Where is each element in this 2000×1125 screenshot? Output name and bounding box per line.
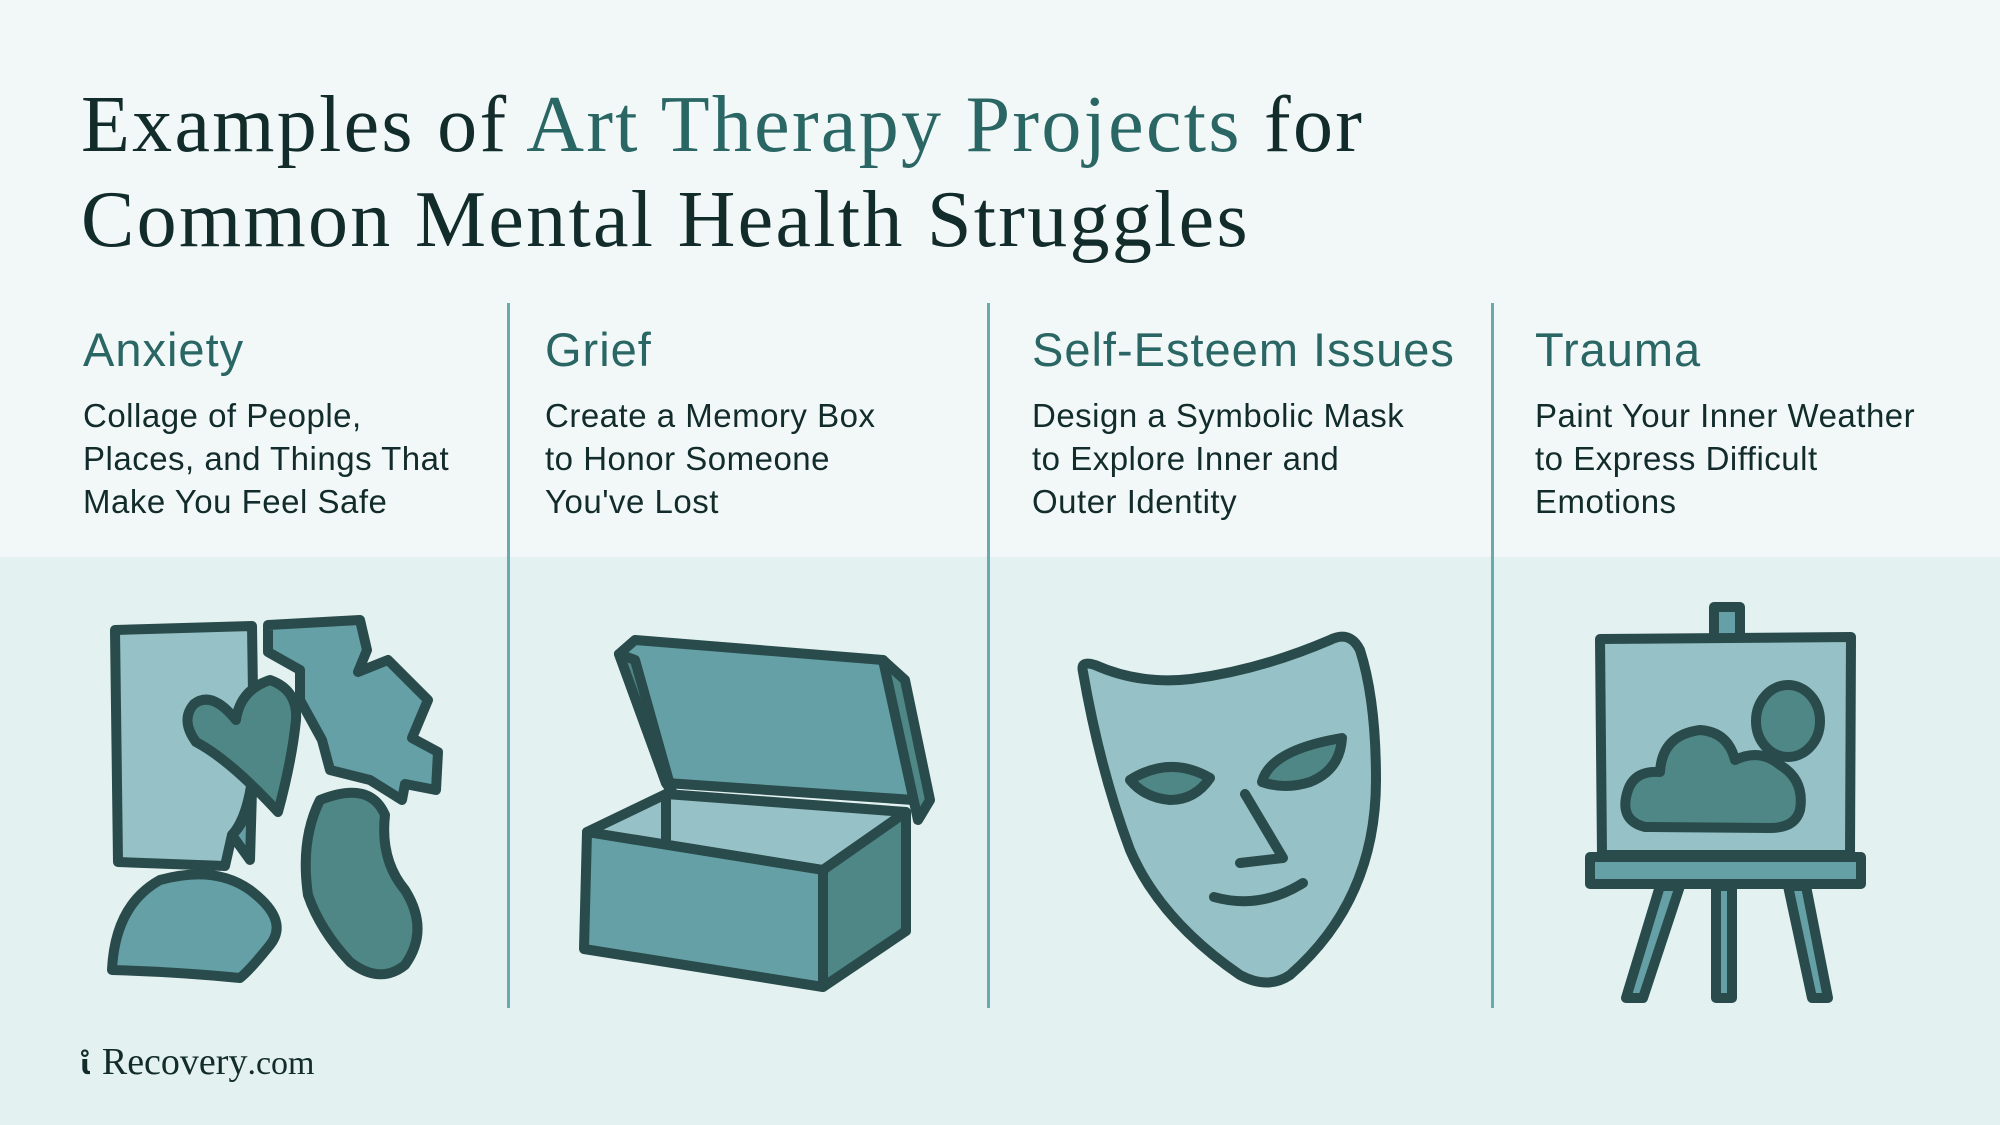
icon: memory box xyxy=(584,640,930,987)
panel: grief xyxy=(545,323,875,520)
panel: trauma: to Express Difficult xyxy=(1535,440,1818,477)
panel: anxiety: Anxiety xyxy=(83,323,244,376)
panel: anxiety: Make You Feel Safe xyxy=(83,483,387,520)
panel: self-esteem: to Explore Inner and xyxy=(1032,440,1339,477)
icon: mask xyxy=(1082,637,1376,982)
panel: grief: You've Lost xyxy=(545,483,719,520)
panel: trauma: Paint Your Inner Weather xyxy=(1535,397,1915,434)
panel: anxiety: Collage of People, xyxy=(83,397,362,434)
panel: self-esteem: Design a Symbolic Mask xyxy=(1032,397,1404,434)
icon: easel xyxy=(1590,607,1861,998)
icon: collage xyxy=(112,620,438,978)
panel: self-esteem: Self-Esteem Issues xyxy=(1032,323,1455,376)
panel: grief: Create a Memory Box xyxy=(545,397,875,434)
panel: trauma: Trauma xyxy=(1535,323,1701,376)
panel: self-esteem xyxy=(1032,323,1455,520)
panel: grief: to Honor Someone xyxy=(545,440,830,477)
panel: self-esteem: Outer Identity xyxy=(1032,483,1237,520)
panel: anxiety: Places, and Things That xyxy=(83,440,449,477)
panel: grief: Grief xyxy=(545,323,652,376)
title: Examples of Art Therapy Projects for xyxy=(81,81,1364,169)
panel: trauma xyxy=(1535,323,1915,520)
logo: ɩ̊ Recovery.com xyxy=(80,1041,314,1083)
title: Common Mental Health Struggles xyxy=(81,176,1250,264)
panel: trauma: Emotions xyxy=(1535,483,1677,520)
panel: anxiety xyxy=(83,323,449,520)
title xyxy=(81,81,1364,264)
